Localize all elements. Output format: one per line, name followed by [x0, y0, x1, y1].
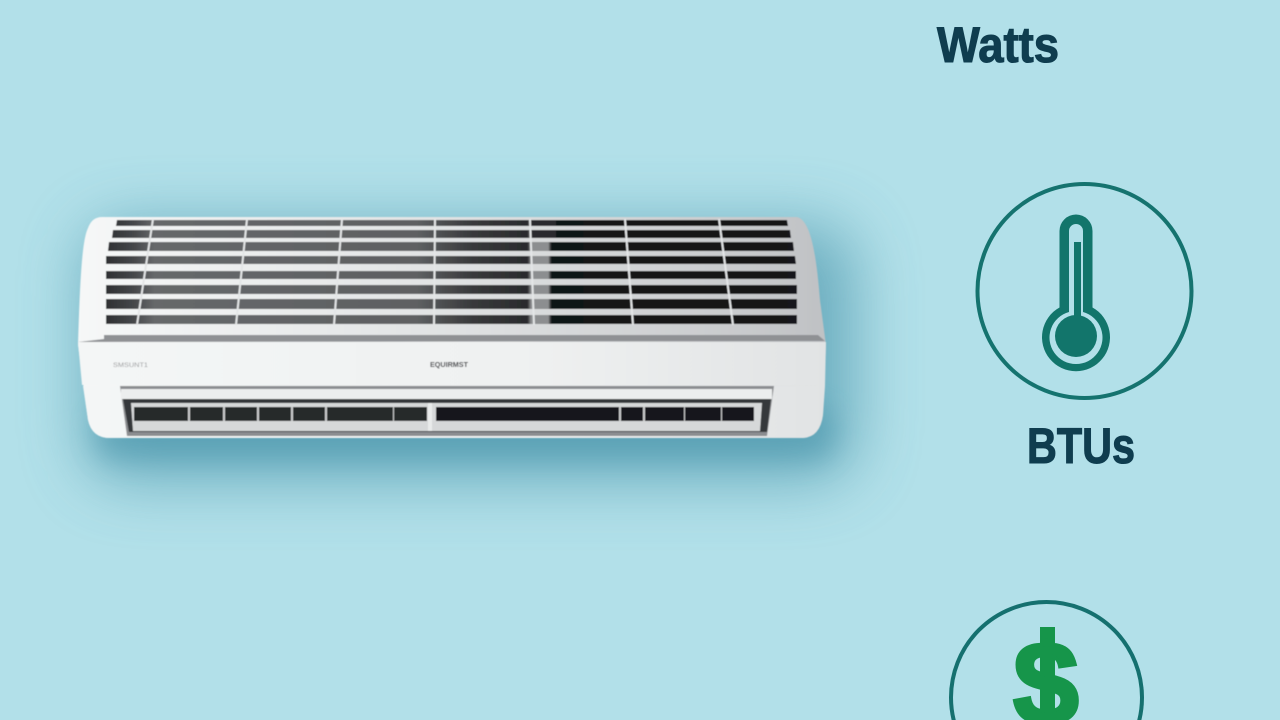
grille openings: [106, 220, 797, 324]
front band: [78, 342, 826, 386]
left label: SMSUNT1: [113, 362, 148, 369]
mercury column: [1074, 242, 1081, 322]
icon: dollar: [951, 602, 1142, 720]
dollar bar: [1040, 627, 1055, 720]
icon ring: [951, 602, 1142, 720]
thermometer outline: [1042, 214, 1110, 371]
seam line: [78, 335, 825, 342]
dark top rows over the light strip: [530, 220, 556, 238]
air conditioner unit: [78, 217, 826, 438]
mercury bulb: [1055, 315, 1097, 357]
label: BTUs: BTUs: [1027, 418, 1135, 474]
center brand label: EQUIRMST: [430, 360, 468, 369]
lower vent: [120, 386, 774, 436]
icon: thermometer: [978, 184, 1192, 398]
unit body: [78, 217, 826, 438]
icon ring: [978, 184, 1192, 398]
air conditioner shadow: [85, 225, 855, 480]
grille vertical bars: [137, 219, 733, 325]
thermometer interior: [1050, 224, 1102, 364]
lower corners: [83, 386, 825, 438]
heading: Watts: Watts: [937, 17, 1059, 73]
